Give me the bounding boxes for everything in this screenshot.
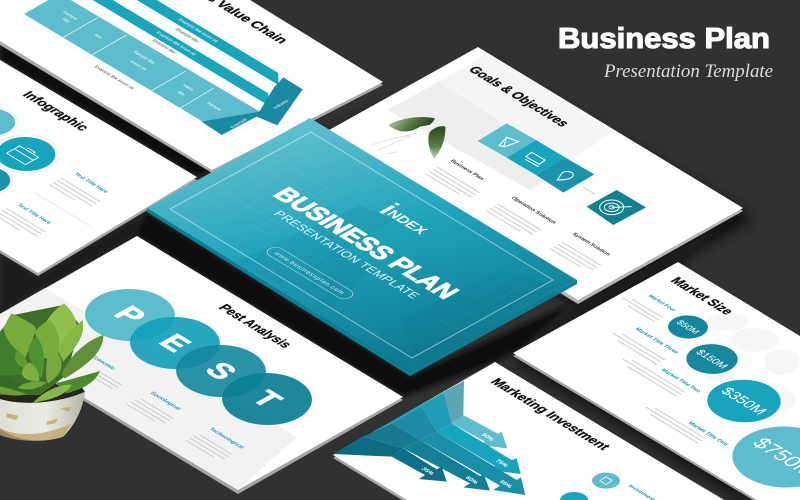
funnel arrows chart: [333, 381, 525, 495]
url pill: www.businessplan.com: [271, 251, 346, 296]
circle P: [66, 278, 194, 352]
market labels: [609, 294, 729, 447]
chain labels: lorem sit: [129, 60, 148, 71]
bubble $750M: [711, 414, 800, 500]
logo: index: [373, 199, 432, 237]
subtitle: presentation template: Presentation Template: [603, 61, 773, 82]
arrow percent labels: 60%: [463, 476, 479, 485]
panel: cover slide: [147, 118, 577, 376]
chain graphic: [24, 0, 303, 135]
market labels: Market Title Two: [659, 368, 703, 394]
arrow percent labels: 35%: [419, 467, 435, 476]
chain labels: Sample title: [132, 50, 157, 65]
heading: pest analysis: Pest Analysis: [215, 302, 295, 350]
chain labels: Value: [181, 83, 196, 92]
pest labels: Sociological: [148, 391, 182, 411]
arrow percent labels: [419, 433, 513, 489]
heading: marketing investment: Marketing Investment: [487, 376, 614, 452]
arrow percent labels: 90%: [479, 433, 495, 442]
text block: second title: [0, 203, 52, 238]
panel: infographic slide: [0, 60, 197, 276]
text block: first title: Text Title Here: [72, 172, 109, 194]
letters: P: [107, 302, 153, 328]
panel: pest analysis slide: [0, 236, 403, 494]
letters: E: [152, 330, 198, 356]
arrow percent labels: 75%: [493, 459, 509, 468]
bubble $350M: $350M: [717, 385, 771, 417]
circle E: [111, 306, 239, 380]
letters: T: [244, 387, 289, 412]
chain labels: title: [176, 90, 187, 97]
bubble $50M: [660, 311, 716, 343]
chain labels: Sample: [62, 10, 79, 21]
panel: marketing investment slide: [333, 362, 725, 500]
panel: value chain slide: [0, 0, 383, 173]
chain labels: Example title lorem sit: [177, 18, 220, 43]
chain labels: Example title: [174, 27, 201, 43]
chain labels: title: [61, 17, 72, 24]
title: business plan: Business Plan: [558, 23, 770, 55]
plant photo: [372, 117, 445, 159]
cover subtitle: PRESENTATION TEMPLATE: [270, 209, 423, 301]
goals text: [425, 159, 612, 272]
cover title: BUSINESS PLAN: [267, 183, 466, 303]
chain labels: Industry: [272, 99, 290, 110]
slide shadows: [300, 60, 780, 500]
plant pot photo: [0, 303, 103, 441]
letters: S: [198, 358, 244, 384]
chain labels: title: [93, 33, 104, 40]
bubble $350M: [692, 371, 796, 431]
heading: market size: Market Size: [667, 275, 737, 317]
circle T: [203, 362, 331, 436]
arrow percent labels: 55%: [497, 480, 513, 489]
building texture: [210, 157, 525, 337]
icon tiles: [478, 123, 646, 225]
url pill: [264, 245, 356, 301]
bubble $50M: $50M: [674, 319, 702, 335]
goals text: Business Plan: [448, 159, 486, 181]
chain labels: Example title: [151, 38, 178, 54]
chain labels: Sample: [206, 101, 223, 112]
heading: infographic: Infographic: [19, 89, 93, 133]
pest labels: [89, 354, 245, 461]
cover border: [170, 132, 553, 358]
panel: goals and objectives slide: [313, 47, 743, 304]
world map: [706, 313, 800, 410]
market labels: Market Title Three: [633, 327, 680, 355]
circle diagram: [0, 101, 73, 201]
circle S: [157, 334, 285, 408]
chain labels: [61, 10, 290, 129]
heading: goals: Goals & Objectives: [465, 64, 573, 129]
pest labels: Economic: [89, 354, 117, 371]
goals text: Operation Solution: [509, 196, 558, 225]
logo: index: i: [373, 199, 405, 218]
text block: second title: Text Title Here: [15, 203, 52, 225]
bubble $150M: $150M: [693, 348, 731, 370]
market labels: Market Four: [646, 294, 678, 313]
contact shadows between slides: [0, 41, 743, 397]
chain labels: Example title lorem sit: [93, 65, 136, 90]
letters: [107, 302, 289, 412]
goals text: System Solution: [570, 232, 612, 257]
pest labels: Technological: [207, 427, 245, 450]
market labels: Market Title One: [686, 421, 729, 447]
investment icons: [560, 473, 620, 500]
chain labels: Example: [229, 117, 249, 129]
chain labels: Example title lorem sit: [155, 31, 198, 56]
logo: index: NDEX: [383, 208, 432, 237]
text block: first title: [49, 172, 109, 208]
panel: market size slide: [513, 262, 800, 500]
icon: briefcase: [7, 144, 41, 165]
bubble $150M: [676, 338, 748, 380]
